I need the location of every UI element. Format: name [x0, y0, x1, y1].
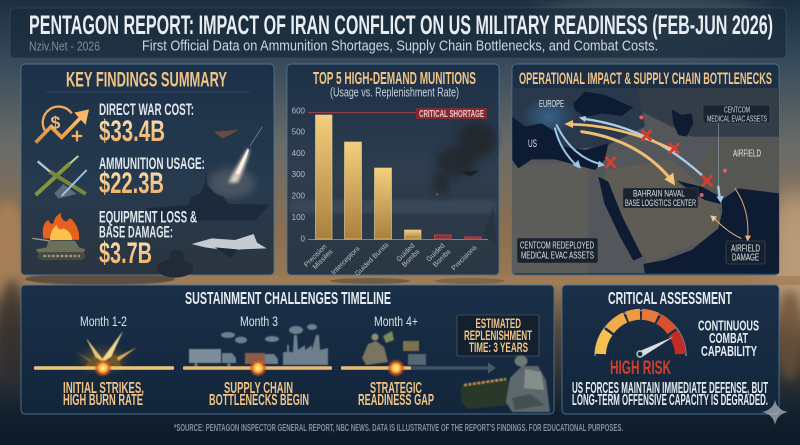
icon: dollar growth arrow: $	[50, 112, 60, 132]
heading: TOP 5 HIGH-DEMAND MUNITIONS	[313, 68, 476, 88]
month labels: Month 3	[240, 313, 278, 329]
month labels: Month 4+	[374, 313, 418, 329]
bar chart: Bombs	[401, 248, 422, 269]
stage label: initial strikes	[63, 380, 144, 409]
supply routes	[555, 116, 751, 242]
bar chart: 400	[292, 149, 306, 158]
month labels	[80, 313, 418, 329]
map label: airfield: AIRFIELD	[733, 148, 761, 160]
bar chart: Precisions	[451, 244, 479, 272]
bar chart: Bombs	[432, 248, 453, 269]
bar chart: 200	[292, 192, 306, 200]
Mediterranean Sea	[512, 117, 608, 170]
map label: airfield damage: DAMAGE	[732, 252, 759, 264]
critical shortage tag: CRITICAL SHORTAGE	[419, 109, 484, 120]
stage label: supply chain bottlenecks: BOTTLENECKS BEGIN	[209, 392, 309, 409]
scene: warship, rocket and jets	[146, 127, 270, 278]
bar chart: Guided	[395, 242, 416, 263]
Persian Gulf	[677, 181, 720, 204]
map label: CENTCOM redeployed medical evac assets: CENTCOM REDEPLOYED	[520, 240, 594, 252]
stat: ammunition usage	[99, 155, 205, 200]
Red Sea	[598, 177, 642, 261]
stat: direct war cost: $33.4B	[99, 115, 165, 148]
callout: estimated replenishment time: REPLENISHMENT	[464, 327, 532, 343]
stat: ammunition usage: $22.3B	[99, 167, 164, 200]
stage label: supply chain bottlenecks: SUPPLY CHAIN	[224, 380, 293, 397]
panel: critical assessment	[562, 285, 779, 414]
assessment text	[572, 380, 768, 409]
bar chart: Guided	[425, 242, 446, 263]
side label: continuous combat capability: CAPABILITY	[701, 343, 757, 360]
icon: explosion and missiles	[75, 331, 137, 370]
map label: US: US	[528, 138, 537, 150]
icon: soldier with crates	[362, 331, 426, 365]
bar chart: 100	[292, 213, 306, 222]
map label: CENTCOM medical evac assets: CENTCOM	[724, 105, 750, 115]
risk label: HIGH RISK	[610, 358, 671, 379]
stage label: strategic readiness gap: READINESS GAP	[358, 392, 434, 409]
map label: CENTCOM redeployed medical evac assets: MEDICAL EVAC ASSETS	[521, 250, 594, 262]
stage label: strategic readiness gap	[358, 380, 434, 409]
gauge needle	[637, 336, 674, 357]
callout: estimated replenishment time: ESTIMATED	[476, 315, 521, 331]
panel: sustainment challenges timeline	[21, 285, 554, 414]
stage label: strategic readiness gap: STRATEGIC	[370, 380, 422, 397]
icon: trucks, factory and smoke	[189, 324, 328, 367]
stat: equipment loss and base damage: $3.7B	[99, 237, 152, 270]
bar chart: Precision	[303, 243, 328, 269]
scene: smoke plume	[290, 122, 497, 247]
side label: continuous combat capability	[698, 318, 759, 360]
header banner	[10, 8, 786, 58]
stat: direct war cost: DIRECT WAR COST:	[99, 101, 194, 119]
callout: estimated replenishment time: TIME: 3 YEARS	[469, 339, 528, 355]
illustration: soldier and ammunition crate	[461, 356, 550, 412]
heading: SUSTAINMENT CHALLENGES TIMELINE	[185, 288, 391, 308]
icon: crossed missiles	[36, 156, 87, 199]
critical shortage tag	[416, 108, 487, 120]
stage label: supply chain bottlenecks	[209, 380, 309, 409]
stage label: initial strikes: HIGH BURN RATE	[63, 392, 143, 409]
map label: CENTCOM redeployed medical evac assets	[517, 238, 598, 263]
bar chart: 600	[292, 106, 306, 116]
icon: burning tank	[32, 213, 86, 260]
bar chart: Missiles	[312, 248, 335, 271]
gauge: high risk	[595, 310, 686, 379]
Arabian Sea	[643, 188, 779, 273]
map label: airfield damage	[726, 241, 765, 264]
panel: top 5 high-demand munitions	[287, 64, 499, 278]
callout: estimated replenishment time	[457, 315, 539, 356]
month labels: Month 1-2	[80, 313, 127, 329]
map of the Middle East	[512, 88, 779, 273]
stage label: initial strikes: INITIAL STRIKES,	[63, 380, 144, 397]
stat: equipment loss and base damage: EQUIPMENT LOSS &	[99, 208, 197, 226]
stat: direct war cost	[99, 101, 194, 148]
map label: Bahrain naval base logistics center: BAHRAIN NAVAL	[633, 189, 685, 200]
stat: ammunition usage: AMMUNITION USAGE:	[99, 155, 205, 173]
timeline track	[34, 359, 496, 377]
bar chart: 500	[292, 128, 306, 136]
icon: dollar growth arrow	[36, 107, 89, 143]
side label: continuous combat capability: COMBAT	[709, 330, 748, 347]
bar chart	[292, 106, 488, 278]
map label: Europe: EUROPE	[539, 98, 564, 110]
bar chart: Interceptors	[330, 245, 362, 277]
panel: operational impact and supply chain bottlenecks	[512, 64, 779, 275]
stat: equipment loss and base damage: BASE DAMAGE:	[99, 224, 173, 242]
map label: Bahrain naval base logistics center: BASE LOGISTICS CENTER	[625, 198, 696, 209]
stat: equipment loss and base damage	[99, 208, 197, 270]
bar chart: 0	[301, 234, 306, 244]
map label: airfield damage: AIRFIELD	[731, 243, 760, 255]
panel: key findings summary	[21, 64, 274, 278]
Caspian Sea	[672, 109, 693, 137]
map label: Bahrain naval base logistics center	[623, 188, 698, 209]
Black Sea	[573, 92, 633, 117]
subtitle: First Official Data on Ammunition Shortages, Supply Chain Bottlenecks, and Combat Costs.	[142, 38, 658, 54]
strike markers	[606, 131, 711, 185]
subheading: (Usage vs. Replenishment Rate)	[330, 86, 459, 100]
side label: continuous combat capability: CONTINUOUS	[698, 318, 759, 334]
heading: KEY FINDINGS SUMMARY	[66, 68, 227, 92]
bar chart: 300	[292, 170, 306, 179]
icon: sparkle watermark	[762, 400, 788, 425]
site credit: Nziv.Net - 2026	[29, 40, 100, 54]
bar chart: Guided Bursts	[354, 241, 391, 278]
map label: CENTCOM medical evac assets	[703, 105, 770, 123]
